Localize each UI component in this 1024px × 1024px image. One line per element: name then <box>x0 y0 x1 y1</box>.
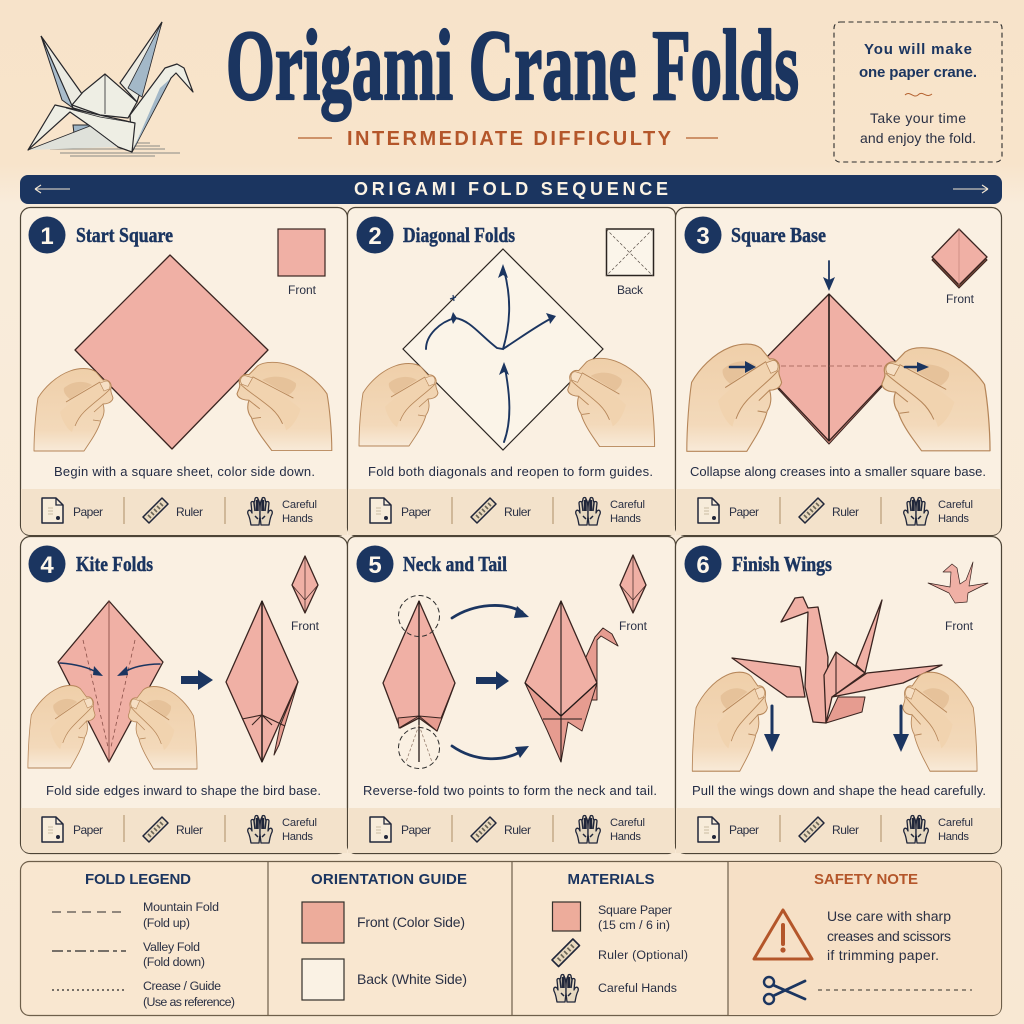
number badge 6: 6 <box>696 552 710 579</box>
left hand <box>34 368 113 451</box>
diagram: white square <box>403 249 603 450</box>
left hand <box>692 672 767 771</box>
right hand <box>568 358 655 447</box>
section: fold legend: Crease / Guide <box>143 979 221 993</box>
number badge 1 <box>28 216 66 254</box>
arrow: down <box>823 261 835 291</box>
section: safety note <box>754 871 972 1004</box>
caption: Reverse-fold two points to form the neck and tail. <box>363 783 657 798</box>
label: back: Back <box>617 283 644 297</box>
arrow: right <box>181 670 213 690</box>
number badge 3: 3 <box>696 223 710 250</box>
label: front: Front <box>288 283 317 297</box>
left hand <box>28 686 95 768</box>
curved arrow: top <box>452 605 529 618</box>
materials row <box>370 815 645 843</box>
left hand <box>359 364 438 446</box>
callout: goal note: and enjoy the fold. <box>860 130 976 146</box>
caption: Begin with a square sheet, color side down. <box>54 464 315 479</box>
materials row <box>42 497 317 525</box>
subtitle: difficulty: INTERMEDIATE DIFFICULTY <box>347 128 672 150</box>
number badge 5 <box>356 546 394 582</box>
banner: fold sequence: ORIGAMI FOLD SEQUENCE <box>354 179 668 199</box>
callout: goal note: You will make <box>864 41 972 58</box>
section: safety note: Use care with sharp <box>827 908 951 924</box>
section: fold legend: (Use as reference) <box>143 995 235 1009</box>
materials row: Careful <box>282 499 317 511</box>
caption: Fold side edges inward to shape the bird base. <box>46 783 321 798</box>
section: fold legend: Valley Fold <box>143 940 200 954</box>
icon: scissors <box>764 977 805 1004</box>
label: front: Front <box>946 292 975 306</box>
heading: neck and tail: Neck and Tail <box>403 552 507 576</box>
section: materials: Square Paper <box>598 903 672 917</box>
materials row: Hands <box>610 831 641 843</box>
arrow: right <box>476 671 509 690</box>
materials row: Ruler <box>832 823 859 837</box>
header crane illustration <box>28 22 193 156</box>
label: front: Front <box>291 619 320 633</box>
icon: small kite <box>292 556 318 613</box>
materials row: Ruler <box>504 505 531 519</box>
caption: Fold both diagonals and reopen to form guides. <box>368 464 653 479</box>
heading: start square: Start Square <box>76 223 173 247</box>
curved arrow: bottom <box>452 746 529 759</box>
materials row: Paper <box>73 823 103 837</box>
panel: step 6 <box>676 536 1002 854</box>
materials row: Hands <box>610 513 641 525</box>
materials row: Paper <box>73 505 103 519</box>
number badge 1: 1 <box>40 223 54 250</box>
materials row: Hands <box>282 513 313 525</box>
materials row <box>42 815 317 843</box>
number badge 4: 4 <box>40 552 54 579</box>
safety panel background <box>728 862 1001 1015</box>
section: orientation guide: Back (White Side) <box>357 971 467 987</box>
materials row: Paper <box>401 505 431 519</box>
section: materials: Careful Hands <box>598 981 677 995</box>
section: materials <box>552 871 688 1002</box>
right hand <box>128 686 197 769</box>
panel: step 3 <box>676 208 1002 536</box>
caption: Collapse along creases into a smaller square base. <box>690 464 986 479</box>
right hand <box>882 348 990 451</box>
diagram: kite with target circles <box>383 596 455 768</box>
fold arrows <box>426 264 556 442</box>
section: orientation guide: ORIENTATION GUIDE <box>311 871 467 888</box>
section: safety note: SAFETY NOTE <box>814 871 918 888</box>
number badge 4 <box>28 546 66 582</box>
number badge 2 <box>356 216 394 254</box>
section: materials: Ruler (Optional) <box>598 948 688 962</box>
icon: small base <box>932 229 987 288</box>
diagram: finished crane <box>732 597 942 723</box>
materials row <box>370 497 645 525</box>
heading: square base: Square Base <box>731 223 826 247</box>
materials row: Careful <box>610 817 645 829</box>
callout: goal note: Take your time <box>870 110 966 126</box>
materials row: Hands <box>282 831 313 843</box>
materials row: Careful <box>282 817 317 829</box>
number badge 2: 2 <box>368 223 382 250</box>
label: front: Front <box>619 619 648 633</box>
section: materials: (15 cm / 6 in) <box>598 918 670 932</box>
materials row: Paper <box>401 823 431 837</box>
section: safety note: if trimming paper. <box>827 947 939 963</box>
arrow: down left <box>764 706 780 752</box>
section: orientation guide: Front (Color Side) <box>357 914 465 930</box>
fold arrows <box>60 663 160 676</box>
right hand <box>903 672 977 771</box>
section: safety note: creases and scissors <box>827 928 951 944</box>
pinch arrows <box>730 361 929 373</box>
materials row: Careful <box>610 499 645 511</box>
icon: warning triangle <box>754 910 812 959</box>
panel: step 5 <box>348 536 676 854</box>
footer panel <box>20 862 1002 1016</box>
caption: Pull the wings down and shape the head carefully. <box>692 783 986 798</box>
section: fold legend: FOLD LEGEND <box>85 871 191 888</box>
diagram: paper diamond <box>75 255 268 449</box>
diagram: narrow kite <box>226 601 298 762</box>
left hand <box>687 344 782 451</box>
banner: fold sequence <box>20 175 1002 204</box>
materials row: Ruler <box>176 823 203 837</box>
section: orientation guide <box>302 871 467 1000</box>
materials row <box>698 815 973 843</box>
section: fold legend: Mountain Fold <box>143 900 219 914</box>
materials row: Paper <box>729 823 759 837</box>
materials row: Paper <box>729 505 759 519</box>
heading: kite folds: Kite Folds <box>76 552 153 576</box>
number badge 6 <box>684 546 722 582</box>
heading: diagonal folds: Diagonal Folds <box>403 223 515 247</box>
section: materials: MATERIALS <box>568 871 654 888</box>
icon: small crane <box>928 562 988 603</box>
number badge 5: 5 <box>368 552 382 579</box>
materials row: Careful <box>938 499 973 511</box>
callout: goal note: one paper crane. <box>859 64 977 81</box>
right hand <box>237 362 332 451</box>
diagram: kite fold <box>58 601 163 762</box>
icon: back square <box>606 229 654 276</box>
panel: step 4 <box>20 536 348 854</box>
materials row: Hands <box>938 831 969 843</box>
icon: front square <box>278 229 325 276</box>
callout: goal note <box>834 22 1002 162</box>
panel: step 2 <box>348 208 676 536</box>
label: front: Front <box>945 619 974 633</box>
icon: small kite <box>620 555 646 613</box>
diagram: square base <box>758 294 900 444</box>
number badge 3 <box>684 216 722 254</box>
materials row: Hands <box>938 513 969 525</box>
materials row: Ruler <box>504 823 531 837</box>
panel: step 1 <box>20 208 348 536</box>
materials row: Ruler <box>176 505 203 519</box>
materials row: Ruler <box>832 505 859 519</box>
heading: finish wings: Finish Wings <box>732 552 832 576</box>
section: fold legend: (Fold down) <box>143 955 205 969</box>
arrow: down right <box>893 706 909 752</box>
diagram: neck and tail shape <box>525 601 618 762</box>
materials row <box>698 497 973 525</box>
materials row: Careful <box>938 817 973 829</box>
section: fold legend: (Fold up) <box>143 916 190 930</box>
section: fold legend <box>52 871 235 1009</box>
